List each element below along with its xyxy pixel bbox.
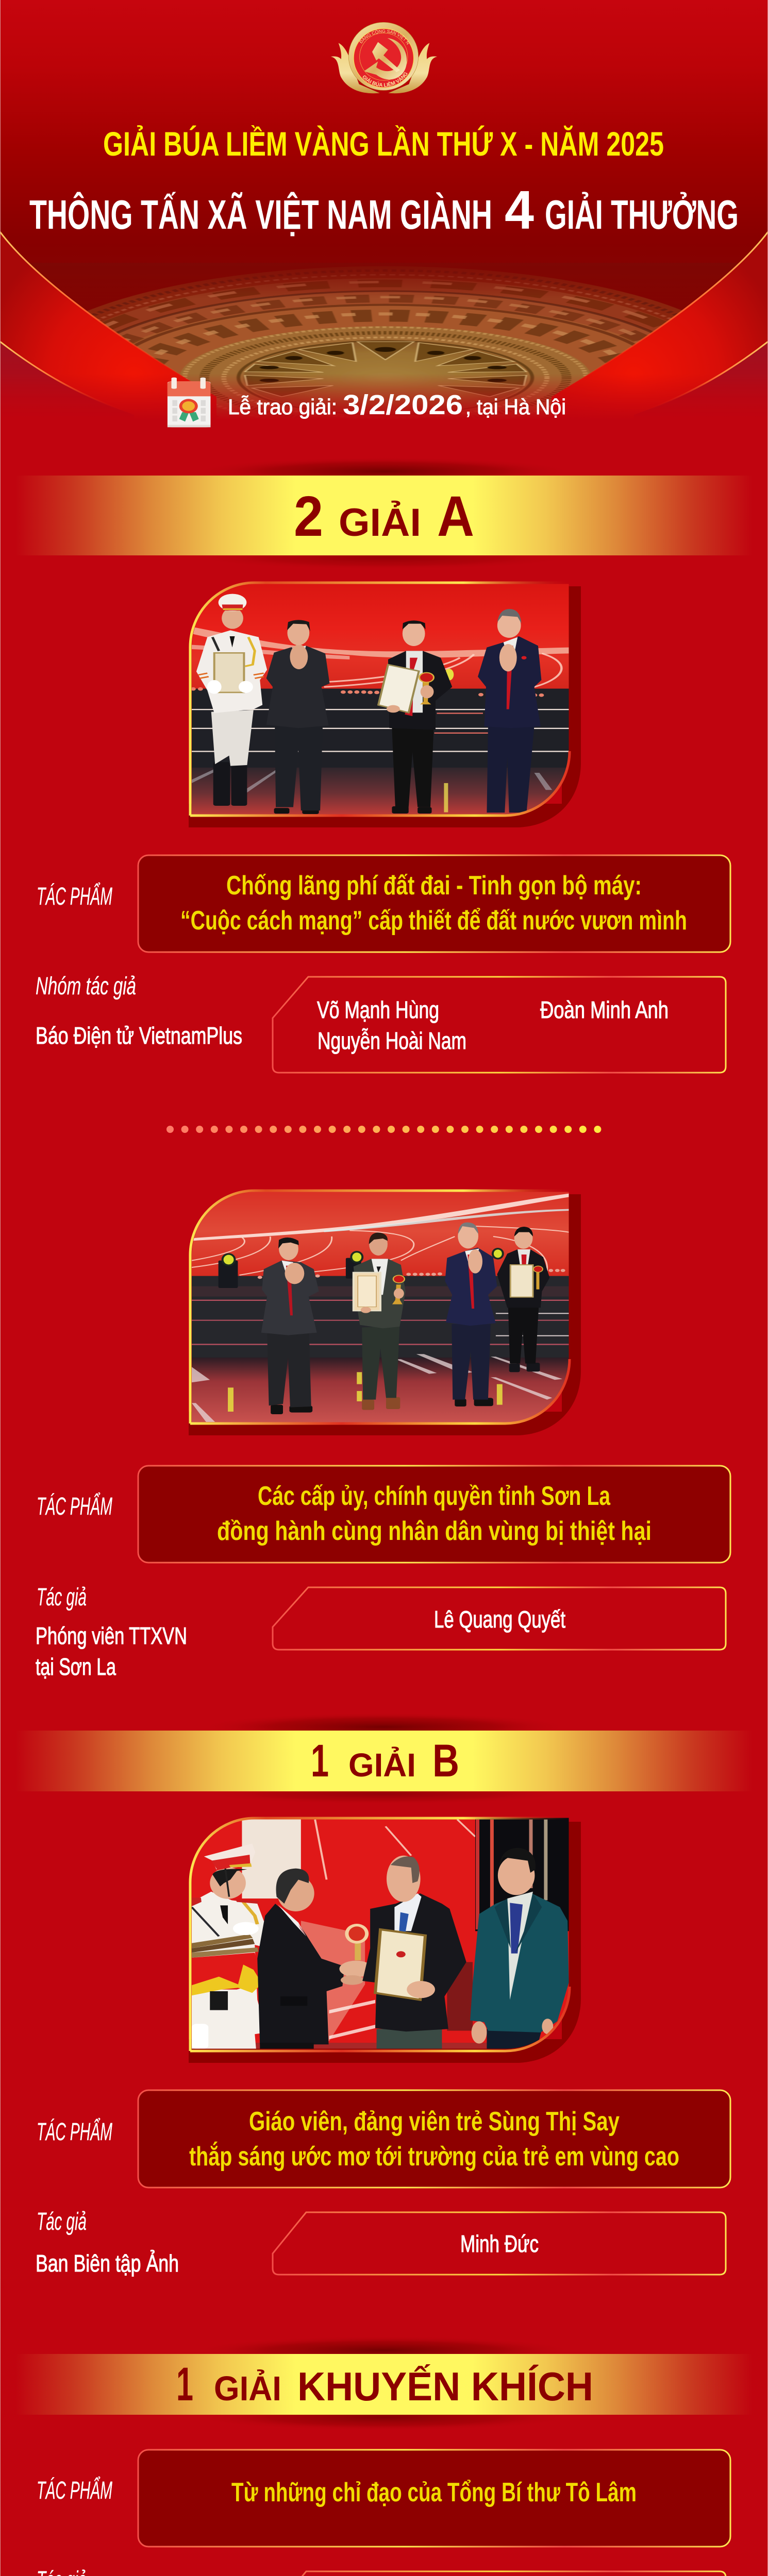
person: award winner with glasses xyxy=(354,1232,406,1410)
date line: 3/2/2026 xyxy=(343,389,463,420)
panel: work title 2: đồng hành cùng nhân dân vùng bị thiệt hại xyxy=(217,1516,652,1546)
person: elderly man in navy suit xyxy=(445,1223,497,1406)
dotted divider xyxy=(170,1126,601,1133)
icon: golden hammer and sickle award logo: ĐẢNG CỘNG SẢN VIỆT NAM xyxy=(359,29,409,45)
trophy xyxy=(345,1924,369,1960)
panel: work title 3 xyxy=(138,2090,730,2188)
text: organization TTXVN Sơn La: tại Sơn La xyxy=(36,1653,116,1680)
panel: author names 1: Nguyễn Hoài Nam xyxy=(318,1027,466,1054)
panel: author names 1 xyxy=(273,977,726,1073)
date line: Lễ trao giải: xyxy=(228,395,337,419)
text: organization VietnamPlus: Báo Điện tử VietnamPlus xyxy=(36,1022,242,1049)
panel: work title 2 xyxy=(138,1466,730,1563)
panel: author name 3 xyxy=(273,2212,726,2275)
panel: author names 1: Võ Mạnh Hùng xyxy=(317,996,439,1023)
panel: photo of award ceremony 3 xyxy=(186,1811,588,2069)
banner: 1 giải B: GIẢI xyxy=(348,1746,416,1784)
panel: work title 4: Từ những chỉ đạo của Tổng Bí thư Tô Lâm xyxy=(231,2478,637,2507)
icon: calendar with medal xyxy=(168,378,211,427)
panel: author name 4 xyxy=(273,2571,726,2576)
banner: 1 giải khuyến khích xyxy=(0,2336,768,2431)
tray with certificates xyxy=(192,1934,262,1995)
label: work 4: TÁC PHẨM xyxy=(37,2477,112,2504)
text: organization photo desk: Ban Biên tập Ảnh xyxy=(36,2250,179,2277)
panel: photo of award ceremony 2 xyxy=(186,1185,588,1443)
date line xyxy=(228,389,566,420)
label: author group: Nhóm tác giả xyxy=(36,973,136,1000)
person: award winner with certificate and trophy xyxy=(378,620,452,814)
person: guard holding certificate xyxy=(196,594,267,806)
label: work 1: TÁC PHẨM xyxy=(37,883,112,910)
panel: work title 1 xyxy=(138,855,730,952)
label: work 2: TÁC PHẨM xyxy=(37,1493,112,1520)
banner: 2 giải A: 2 xyxy=(294,485,323,548)
panel: photo of award ceremony 1 xyxy=(186,577,588,835)
panel: author name 2 xyxy=(273,1587,726,1650)
icon: golden hammer and sickle award logo: GIẢI BÚA LIỀM VÀNG xyxy=(363,72,407,87)
person: winner in background xyxy=(497,1227,549,1372)
person: elderly man in navy suit applauding xyxy=(478,609,541,812)
text: organization TTXVN Sơn La: Phóng viên TTXVN xyxy=(36,1622,187,1649)
label: author 2: Tác giả xyxy=(37,1584,87,1611)
banner: 1 giải khuyến khích: KHUYẾN KHÍCH xyxy=(297,2364,593,2409)
panel: work title 3: Giáo viên, đảng viên trẻ Sùng Thị Say xyxy=(249,2107,620,2137)
panel: author name 2: Lê Quang Quyết xyxy=(434,1606,565,1633)
banner: 1 giải B xyxy=(0,1713,768,1804)
person: man in dark suit applauding xyxy=(261,1238,319,1414)
icons: stage lights xyxy=(219,1248,504,1288)
label: work 3: TÁC PHẨM xyxy=(37,2118,112,2146)
person: man in teal suit xyxy=(470,1848,569,2049)
person: man in dark suit applauding xyxy=(266,620,330,814)
panel: work title 1: Chống lãng phí đất đai - Tinh gọn bộ máy: xyxy=(226,871,642,901)
banner: 2 giải A xyxy=(0,457,768,570)
panel: author names 1: Đoàn Minh Anh xyxy=(540,996,669,1023)
person: award winner with framed certificate xyxy=(362,1856,466,2049)
title: four awards headline: 4 xyxy=(505,180,534,241)
banner: 2 giải A: GIẢI xyxy=(339,501,421,545)
text: organization TTXVN Sơn La xyxy=(36,1622,187,1680)
header background with bronze drum xyxy=(1,76,767,417)
banner: 1 giải B: 1 xyxy=(311,1735,329,1786)
panel: author name 3: Minh Đức xyxy=(460,2230,539,2257)
banner: 1 giải B: B xyxy=(432,1735,459,1786)
icon: golden hammer and sickle award logo xyxy=(331,22,437,94)
banner: 1 giải khuyến khích: GIẢI xyxy=(214,2369,281,2408)
banner: 1 giải khuyến khích: 1 xyxy=(176,2358,193,2411)
person: guard with tray xyxy=(192,1843,279,2049)
banner: 2 giải A: A xyxy=(437,485,474,548)
label: author 3: Tác giả xyxy=(37,2208,87,2235)
panel: work title 4 xyxy=(138,2450,730,2547)
title: four awards headline: THÔNG TẤN XÃ VIỆT NAM GIÀNH xyxy=(29,192,492,238)
panel: work title 2: Các cấp ủy, chính quyền tỉnh Sơn La xyxy=(258,1481,611,1511)
date line: , tại Hà Nội xyxy=(465,395,566,419)
person: man presenting trophy xyxy=(257,1869,373,2049)
